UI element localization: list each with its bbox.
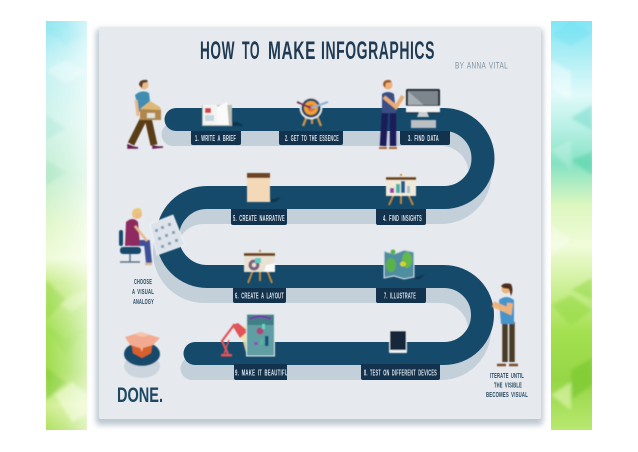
title: TO [242,37,260,65]
icon: layout board [244,250,275,283]
step 3 label [400,131,450,145]
icon: tablet [389,330,407,353]
icon: target [297,96,328,126]
figure: seated person [119,208,152,264]
caption: iterate until the visible becomes visual: THE VISIBLE [494,380,522,390]
step 1 label: 1. WRITE A BRIEF [195,134,236,143]
step 8 label [361,364,440,380]
caption: choose a visual analogy: CHOOSE [134,277,152,286]
icon: map [384,250,425,279]
caption: choose a visual analogy [132,277,154,306]
title: MAKE [268,37,316,65]
step 9 label [234,364,291,380]
step 2 label [279,131,343,145]
icon: notepad [247,173,281,202]
caption: choose a visual analogy: ANALOGY [133,297,154,306]
icon: computer [406,89,440,128]
step 6 label [233,288,286,303]
step 2 label: 2. GET TO THE ESSENCE [285,134,339,143]
caption: iterate until the visible becomes visual [486,371,528,399]
figure: man with box [128,80,163,148]
title: HOW [200,37,235,65]
figure: man at road bend [493,283,518,365]
road shadow [165,134,480,368]
right decorative strip [551,21,592,430]
step 8 label: 8. TEST ON DIFFERENT DEVICES [364,368,437,378]
caption: iterate until the visible becomes visual: BECOMES VISUAL [486,390,528,399]
caption: iterate until the visible becomes visual: ITERATE UNTIL [490,371,524,380]
step 1 label [191,131,241,145]
icon: sheet of sketches [150,215,185,255]
icon: finished open box [124,332,160,378]
step 4 label [376,209,426,225]
caption: choose a visual analogy: A VISUAL [132,287,154,296]
icon: insights board [386,174,416,205]
panel shadow [96,29,543,425]
infographic panel [99,27,541,419]
left decorative strip [46,21,87,430]
byline: BY ANNA VITAL [455,60,508,72]
icon: desk lamp and box [221,314,274,356]
step 4 label: 4. FIND INSIGHTS [383,214,422,223]
figure: man at computer [379,80,403,148]
step 5 label: 5. CREATE NARRATIVE [233,214,285,223]
step 6 label: 6. CREATE A LAYOUT [235,292,284,300]
step 5 label [231,209,287,225]
step 7 label [376,288,426,303]
step 9 label: 9. MAKE IT BEAUTIFUL [235,368,291,378]
title [200,37,435,65]
winding road [168,120,483,354]
icon: open book [202,102,244,126]
step 7 label: 7. ILLUSTRATE [384,292,416,300]
step 3 label: 3. FIND DATA [408,134,439,143]
title: INFOGRAPHICS [321,37,435,65]
done heading: DONE. [117,383,163,407]
